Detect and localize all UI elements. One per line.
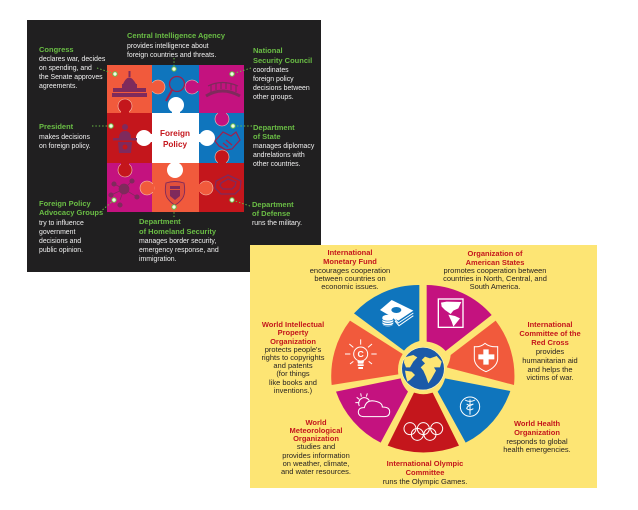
text: red cross: and helps the xyxy=(527,365,573,374)
icon: shield cross xyxy=(474,343,498,372)
text: department of defense xyxy=(252,200,302,227)
text: meteorological: Meteorological xyxy=(290,426,342,435)
icon: capitol xyxy=(112,71,147,97)
text: who: Organization xyxy=(514,428,560,437)
text: oas xyxy=(443,249,547,291)
text: meteorological: on weather, climate, xyxy=(283,459,349,468)
wheel chart xyxy=(331,285,514,452)
text: department of state: andrelations with xyxy=(253,152,305,159)
text: oas: countries in North, Central, and xyxy=(443,274,547,283)
segment: red cross xyxy=(447,321,514,385)
text: president: on foreign policy. xyxy=(39,143,91,150)
text: congress: Congress xyxy=(39,45,74,54)
text: president: makes decisions xyxy=(39,134,90,141)
text: oas: Organization of xyxy=(468,249,523,258)
segment: meteorological xyxy=(336,378,408,443)
icon: americas map xyxy=(438,299,463,327)
text: department of defense: of Defense xyxy=(252,209,290,218)
text: department of defense: runs the military. xyxy=(252,220,302,227)
icon: advocacy network xyxy=(109,179,139,207)
text: homeland security: manages border security, xyxy=(139,238,216,245)
text: olympic: runs the Olympic Games. xyxy=(383,477,467,486)
text: olympic: International Olympic xyxy=(387,459,463,468)
text: oas: South America. xyxy=(470,282,520,291)
icon: globe xyxy=(399,345,447,393)
text: oas: American States xyxy=(466,258,524,267)
text: wipo: (for things xyxy=(276,369,310,378)
segment: olympic xyxy=(388,393,459,452)
segment: who xyxy=(438,378,510,443)
text: national security council: Security Council xyxy=(253,56,312,65)
text: wipo: protects people's xyxy=(265,345,321,354)
icon: president at podium xyxy=(113,124,137,153)
text: advocacy groups: Foreign Policy xyxy=(39,199,92,208)
panel: international organizations xyxy=(250,245,597,488)
text: wipo: Property xyxy=(278,328,309,337)
text: department of state xyxy=(253,123,315,168)
text: advocacy groups xyxy=(39,199,103,254)
text: imf: encourages cooperation xyxy=(310,266,390,275)
text: red cross: Committee of the xyxy=(519,329,581,338)
text: red cross: International xyxy=(527,320,573,329)
text: oas: promotes cooperation between xyxy=(444,266,546,275)
text: national security council: National xyxy=(253,46,283,55)
text: olympic: Committee xyxy=(406,468,444,477)
text: wipo: Organization xyxy=(270,337,316,346)
segment: oas xyxy=(427,285,492,351)
text: advocacy groups: public opinion. xyxy=(39,247,83,254)
text: meteorological: World xyxy=(305,418,327,427)
text: homeland security: emergency response, and xyxy=(139,247,219,254)
text: wipo: and patents xyxy=(273,361,313,370)
text: advocacy groups: government xyxy=(39,229,75,236)
text: central intelligence agency: Central Intelligence Agency xyxy=(127,31,226,40)
text: olympic xyxy=(383,459,467,486)
text: imf xyxy=(310,248,390,291)
text: homeland security: of Homeland Security xyxy=(139,227,217,236)
text: red cross: provides xyxy=(536,347,564,356)
text: wipo: World Intellectual xyxy=(262,320,324,329)
text: homeland security: Department xyxy=(139,217,181,226)
text: congress xyxy=(39,45,106,90)
text: central intelligence agency: provides intelligence about xyxy=(127,43,209,50)
segment: imf xyxy=(354,285,419,351)
text: congress: the Senate approves xyxy=(39,74,103,81)
text: congress: declares war, decides xyxy=(39,56,106,63)
text: national security council: coordinates xyxy=(253,67,289,74)
text: central intelligence agency: foreign countries and threats. xyxy=(127,52,216,59)
text: red cross: victims of war. xyxy=(526,373,574,382)
text: wipo: rights to copyrights xyxy=(262,353,325,362)
text: red cross: Red Cross xyxy=(531,338,569,347)
text: congress: agreements. xyxy=(39,83,77,90)
text: department of state: Department xyxy=(253,123,295,132)
text: imf: Monetary Fund xyxy=(323,257,377,266)
text: national security council xyxy=(253,46,312,101)
panel: foreign policy puzzle xyxy=(27,20,321,272)
connector dots xyxy=(92,58,252,217)
text: who: health emergencies. xyxy=(503,445,571,454)
text: department of defense: Department xyxy=(252,200,294,209)
text: department of state: other countries. xyxy=(253,161,301,168)
text: imf: economic issues. xyxy=(321,282,379,291)
icon: handshake xyxy=(215,132,240,150)
text: red cross xyxy=(519,320,581,382)
text: who: responds to global xyxy=(506,437,568,446)
text: who: World Health xyxy=(514,419,560,428)
icon: magnifying glass xyxy=(166,76,184,101)
text: meteorological xyxy=(281,418,351,476)
text: department of state: manages diplomacy xyxy=(253,143,315,150)
text: national security council: decisions between xyxy=(253,85,310,92)
text: central intelligence agency xyxy=(127,31,226,59)
text: homeland security xyxy=(139,217,219,263)
text: meteorological: studies and xyxy=(297,442,335,451)
icon: light bulb copyright xyxy=(345,339,377,369)
text: meteorological: Organization xyxy=(293,434,339,443)
text: wipo: inventions.) xyxy=(274,386,313,395)
icon: pentagon xyxy=(215,175,241,194)
text: homeland security: immigration. xyxy=(139,256,177,263)
icon: light bulb copyright: C xyxy=(358,349,365,359)
icon: badge xyxy=(165,182,185,205)
text: advocacy groups: decisions and xyxy=(39,238,81,245)
icon: white house xyxy=(206,82,240,96)
icon: olympic rings xyxy=(404,423,443,440)
text: advocacy groups: try to influence xyxy=(39,220,84,227)
text: meteorological: and water resources. xyxy=(281,467,351,476)
label: foreign policy: Foreign xyxy=(160,129,190,138)
text: congress: on spending, and xyxy=(39,65,92,72)
text: red cross: humanitarian aid xyxy=(522,356,578,365)
segment: wipo xyxy=(331,321,403,385)
label: foreign policy xyxy=(160,129,190,149)
icon: money xyxy=(380,300,413,326)
text: wipo xyxy=(262,320,325,395)
text: national security council: foreign policy xyxy=(253,76,294,83)
puzzle xyxy=(107,65,244,212)
text: president: President xyxy=(39,122,74,131)
text: president xyxy=(39,122,91,150)
text: wipo: like books and xyxy=(269,378,317,387)
text: advocacy groups: Advocacy Groups xyxy=(39,208,103,217)
text: department of state: of State xyxy=(253,132,281,141)
text: imf: between countries on xyxy=(314,274,386,283)
text: national security council: other groups. xyxy=(253,94,294,101)
icon: cloud and sun xyxy=(355,393,390,417)
label: foreign policy: Policy xyxy=(163,140,188,149)
text: who xyxy=(503,419,571,454)
text: meteorological: provides information xyxy=(282,451,350,460)
icon: caduceus xyxy=(460,397,480,416)
text: imf: International xyxy=(327,248,373,257)
